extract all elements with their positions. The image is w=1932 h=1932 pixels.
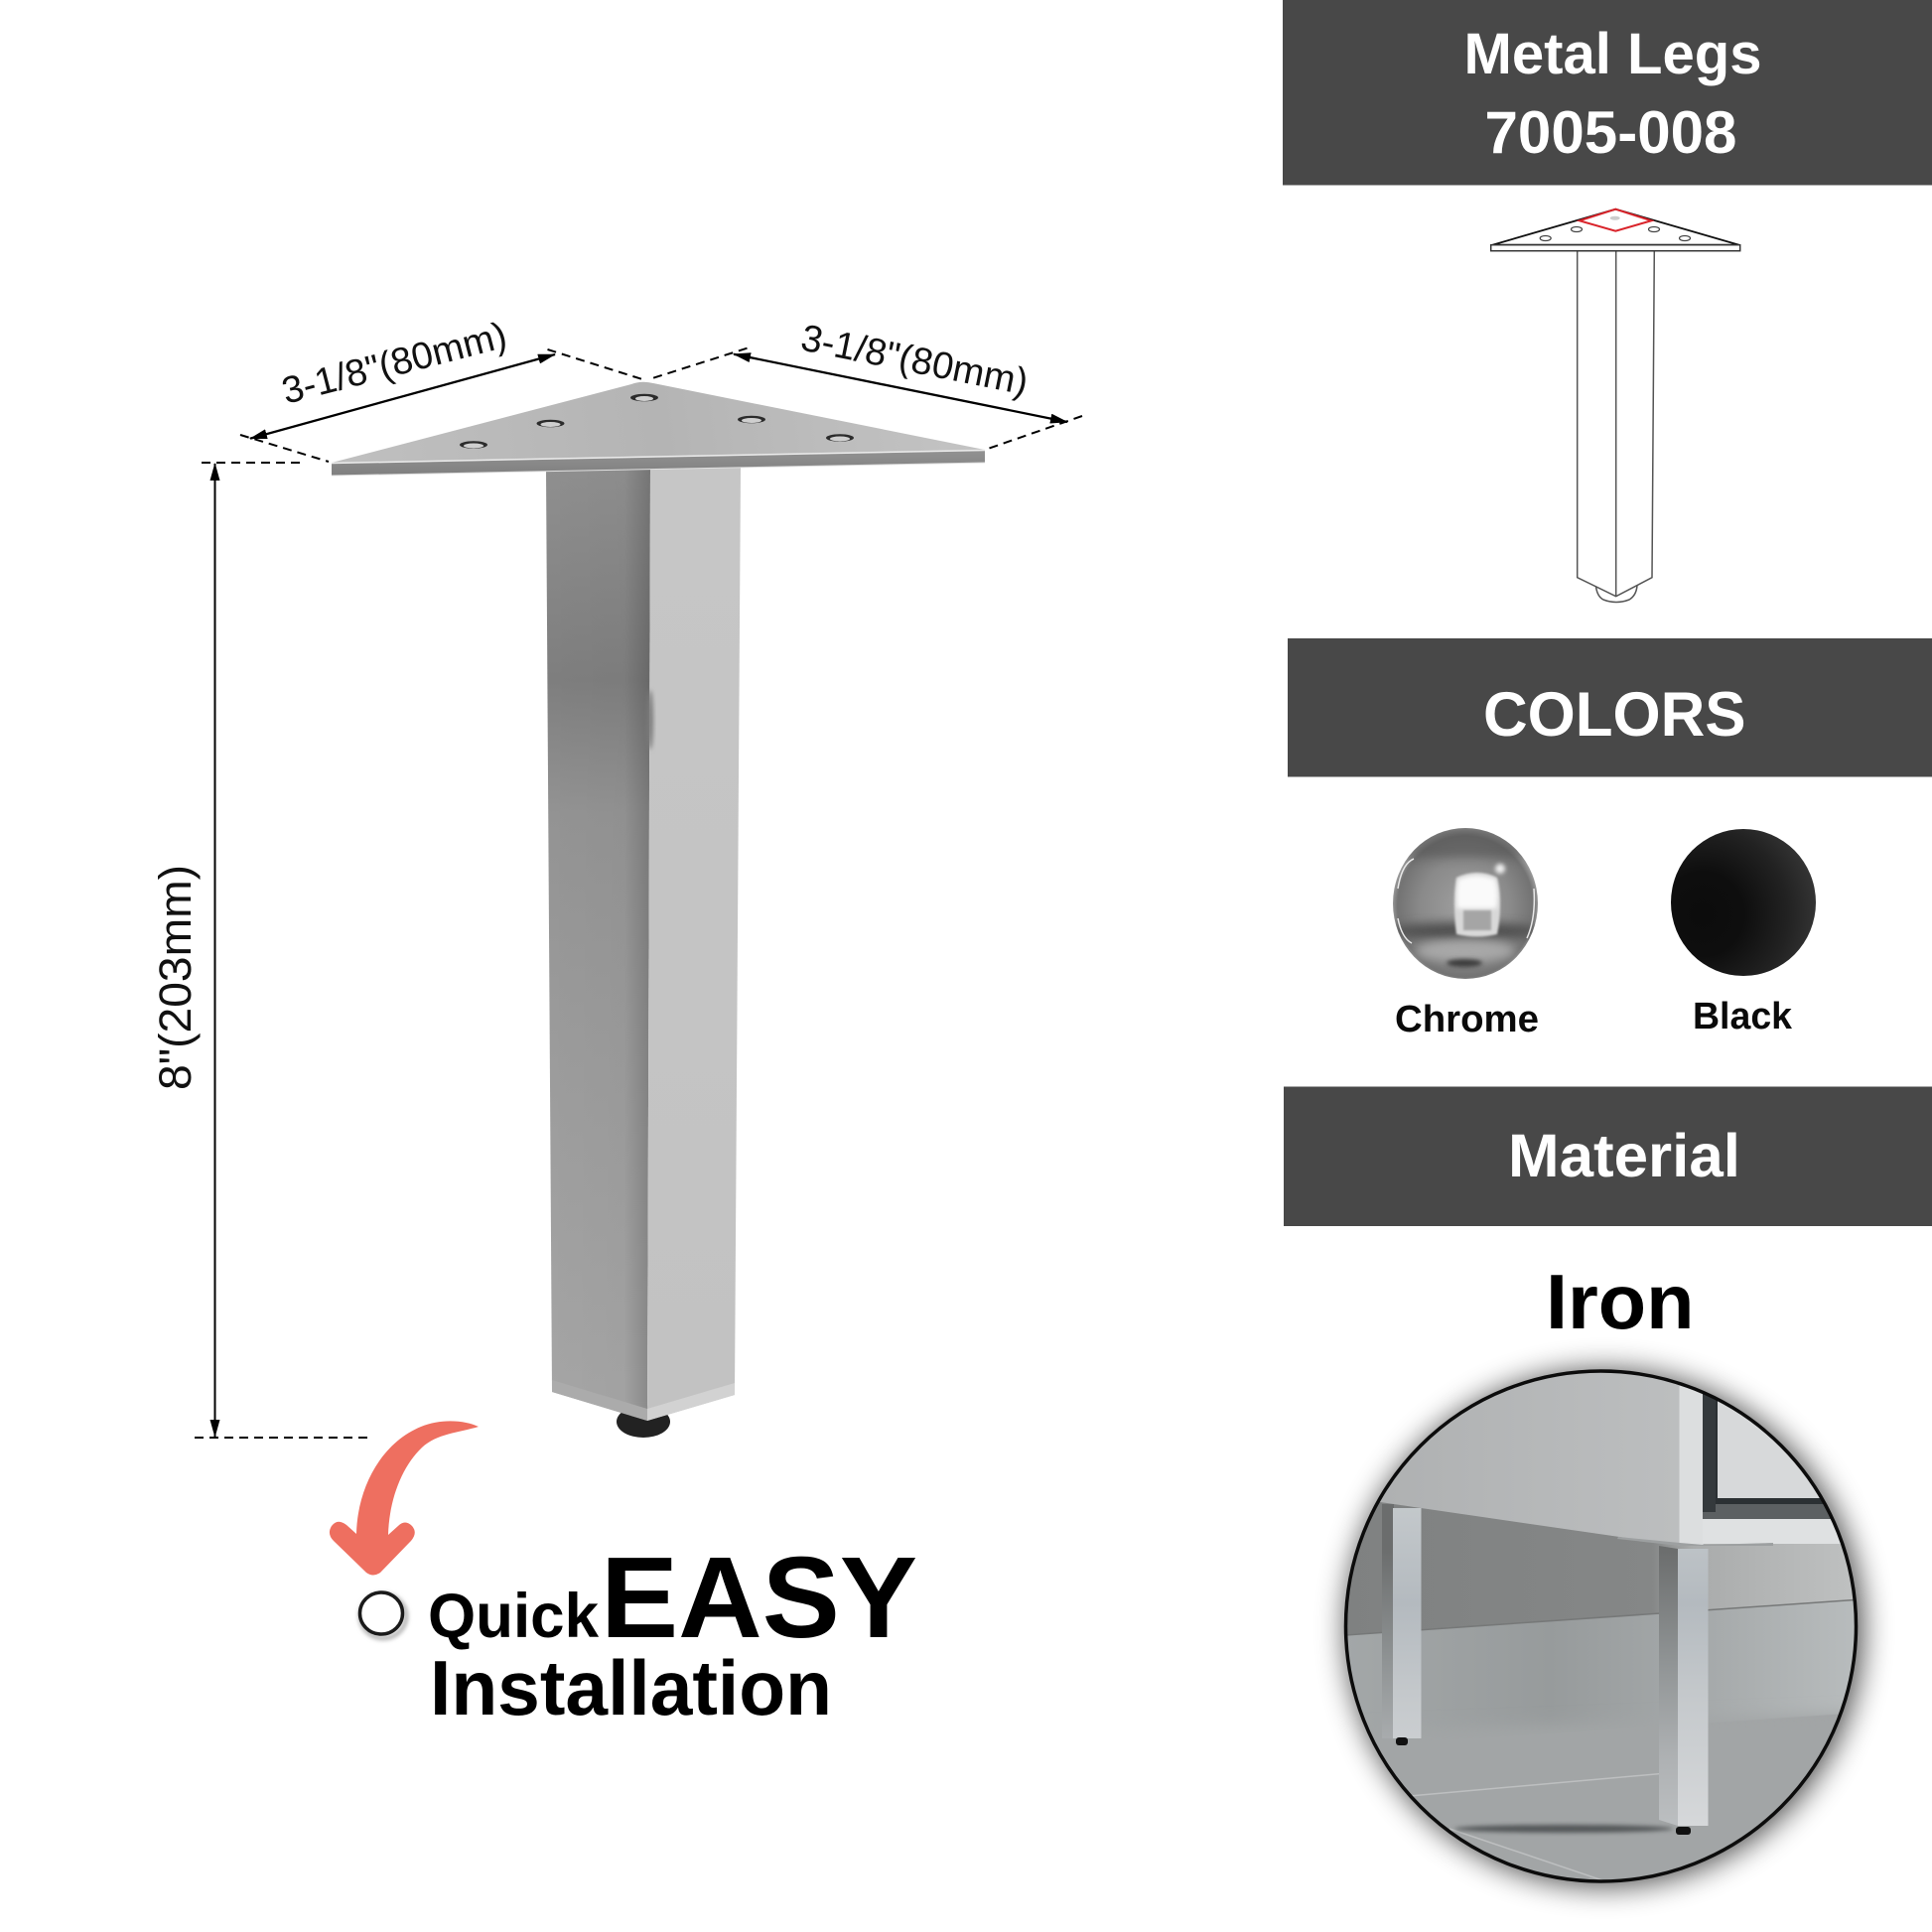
floor — [1517, 1712, 1839, 1735]
line drawing holes — [1540, 216, 1690, 240]
heading: COLORS — [1288, 638, 1932, 776]
arrow: coral curved arrow — [330, 1421, 479, 1575]
heading: Metal Legs 7005-008 — [1283, 0, 1932, 185]
dimension: right plate edge: 3-1/8"(80mm) — [797, 318, 1032, 404]
door recess — [1703, 1504, 1831, 1519]
dimension: left plate edge: 3-1/8"(80mm) — [278, 315, 511, 413]
leg right face — [647, 468, 741, 1421]
leg left face — [546, 470, 650, 1421]
panel: main leg product view — [332, 382, 985, 1438]
heading: Metal Legs 7005-008: 7005-008 — [1485, 99, 1737, 166]
swatch: chrome sphere — [1390, 824, 1541, 979]
leg foot — [617, 1406, 670, 1438]
dimension: right plate edge — [650, 318, 1082, 449]
reflective floor band — [1517, 1600, 1855, 1718]
mounting plate — [332, 382, 985, 476]
label: Chrome: Chrome — [1395, 999, 1539, 1040]
cabinet body — [1380, 1372, 1680, 1543]
swatch: black sphere — [1671, 829, 1816, 976]
text: Iron: Iron — [1546, 1258, 1694, 1345]
right leg — [1659, 1546, 1678, 1826]
dimension: leg height: 8"(203mm) — [150, 865, 201, 1090]
photo: circular cabinet leg scene — [1330, 1365, 1876, 1906]
text: Quick EASY Installation — [428, 1533, 917, 1731]
text: Quick EASY Installation: Quick — [428, 1582, 600, 1651]
wall — [1347, 1502, 1853, 1634]
heading: COLORS: COLORS — [1483, 680, 1745, 750]
diagram: leg line drawing — [1491, 209, 1740, 602]
floor shadow — [1454, 1825, 1673, 1833]
icon: ring bullet — [359, 1592, 406, 1638]
plate screw holes — [460, 394, 854, 449]
text: Quick EASY Installation: Installation — [430, 1644, 832, 1731]
text: Quick EASY Installation: EASY — [601, 1533, 917, 1662]
red mounting zone outline — [1580, 209, 1651, 231]
left leg — [1382, 1504, 1394, 1692]
dimension: left plate edge — [240, 315, 641, 462]
heading: Material — [1284, 1086, 1932, 1226]
heading: Material: Material — [1508, 1122, 1740, 1189]
dimension: leg height — [150, 463, 369, 1438]
label: Black: Black — [1693, 996, 1793, 1037]
heading: Metal Legs 7005-008: Metal Legs — [1463, 22, 1761, 86]
